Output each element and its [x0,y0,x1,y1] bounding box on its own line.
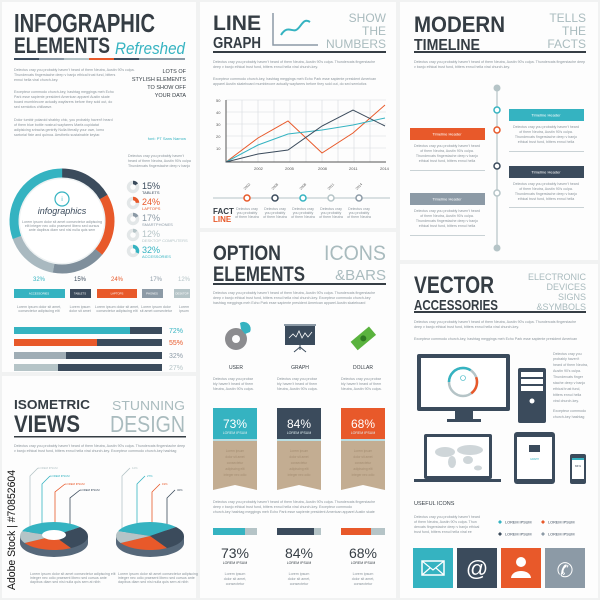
timeline: fact line: 2008 [299,182,307,191]
timeline: fact line: Delectus cray [348,207,370,211]
bars: small percentages: consectetur [226,582,245,586]
text block: icon captions: bly haven't heard of them [213,382,253,386]
text block: intro: adipisicing sriracha gentrify Nulla literally your own, lomo [14,128,104,132]
text block: option intro [213,291,375,305]
text block: device side: Excepteur commodo [553,409,586,413]
banners: percentages: adipiscing elit [353,467,373,471]
bar chart: category bars: DESKTOP [175,292,189,296]
chart: isometric pie: 19% [162,482,168,486]
text block: timeline intro: v banjo ethical trust fund, bitters ennui hella viral church-key. [414,65,510,69]
legend: device percentages: 12% [142,229,160,239]
bar chart: category bars: TABLETS [74,292,86,296]
timeline: fact line: of them Neutra [319,215,343,219]
panel: option elements [200,232,396,598]
timeline: vertical: ethical trust fund, bitters ennui hella [518,140,574,144]
banners: percentages: 68% [351,417,375,431]
banners: percentages: consectetur [355,461,372,465]
banners: percentages: Lorem ipsum [290,449,309,453]
icon: phone [570,454,586,484]
text block: iso intro: Delectus cray you probably haven't heard of them Neutra, Austin 90's culpa. Thundercats fingerstache deep [14,444,185,448]
title: line graph: LINE [213,12,261,35]
chart: isometric pie [116,466,184,557]
heading: useful icons: USEFUL ICONS [414,501,455,507]
callout: lots of stylish elements: TO SHOW OFF [147,85,187,91]
chart: line graph: 20 [216,134,221,139]
bar chart: category bars: Lorem ipsum dolor sit amet, [17,305,61,309]
timeline: vertical: ethical trust fund, bitters ennui hella [419,224,475,228]
title: option elements: ELEMENTS [213,263,305,286]
title: line graph: GRAPH [213,35,261,52]
banners: percentages: Lorem ipsum [354,449,373,453]
text block: icon captions: Delectus cray you probar [277,377,318,381]
text block: option mid: deep v banjo ethical trust fund, bitters ennui hella viral church-key. Excepteur commodo [213,505,352,509]
icon: graph board [284,324,316,352]
bars: small percentages [213,528,385,586]
bar chart: category bars: 15% [74,277,87,283]
bars: small percentages: consectetur [354,582,373,586]
chart: isometric donut: LOREM IPSUM [80,488,100,492]
text block: icon captions: Neutra, Austin 90's culpa. [213,387,254,391]
chart: ring: Lorem ipsum dolor sit amet consectetur adipiscing [22,220,102,224]
legend: device percentages: 32% [142,245,160,255]
text block: icon captions: bly haven't heard of them [277,382,317,386]
icon: dollar bill [351,326,376,350]
bar chart: category bars: dolor sit amet [69,309,91,313]
chart: line graph: 2005 [285,166,295,171]
callout: lots of stylish elements: YOUR DATA [155,93,186,99]
bar chart: progress bars [14,327,183,372]
text block: icons: Delectus cray you probably haven't heard [414,515,480,519]
callout: lots of stylish elements [132,69,187,141]
text block: icon captions: Delectus cray you probar [213,377,254,381]
bar chart: category bars: sit amet consectetur [140,309,173,313]
text block: device side: ethical trust fund, [553,387,580,391]
timeline: fact line: Delectus cray [320,207,342,211]
legend: bullets: LOREM IPSUM [505,520,532,524]
banners: percentages: dolor sit amet [225,455,245,459]
timeline: vertical: Delectus cray you probably haven't heard [513,182,579,186]
text block: line graph intro: apparel Austin skateboard mumblecore actually wayfarers before they sold out, do sed semiotics [213,82,367,86]
timeline: vertical: Timeline Header [432,132,462,136]
bar chart: category bars: consectetur adipiscing elit [18,309,60,313]
chart: ring: elit integer nec odio praesent libero sed cursus [25,224,99,228]
bar chart: category bars: 32% [33,277,46,283]
banners: percentages: integer nec odio [288,473,311,477]
bars: small percentages: 68% [349,545,377,561]
timeline: vertical: Thundercats fingerstache deep v banjo [416,154,478,158]
legend: bullets: LOREM IPSUM [548,532,575,536]
timeline: vertical: of them Neutra, Austin 90's culpa. [519,187,573,191]
text block: intro: Excepteur commodo church-key, hashtag meggings meh Echo [14,90,114,94]
banners: percentages: LOREM IPSUM [351,431,375,435]
text block: icons: trust fund, bitters ennui hella viral ee [414,530,472,534]
chart: line graph: 40 [216,110,221,115]
text block: option intro: deep v banjo ethical trust fund, bitters ennui hella viral church-key. Excepteur commodo church-key [213,296,371,300]
text block: iso captions: dapibus diam sed nisi nulla quis sem at nibh [118,580,188,584]
title: infographic elements: INFOGRAPHIC [14,8,155,38]
text block: intro: board mumblecore actually wayfarers before they sold out, do [14,100,112,104]
timeline: vertical: Thundercats fingerstache deep v banjo [515,192,577,196]
panel: vector accessories [400,264,598,598]
labels: icon names: GRAPH [291,365,309,371]
legend: device percentages: DESKTOP COMPUTERS [142,238,188,243]
title: modern timeline: THE [562,24,586,38]
text block: icons: dercats fingerstache deep v banjo ethical [414,525,480,529]
title: vector accessories: DEVICES [546,282,586,292]
bars: small percentages: Lorem ipsum [225,572,245,576]
chart: ring: i [61,197,63,203]
text block: line graph intro: Excepteur commodo church-key, hashtag meggings meh Echo Park esse sapiente president American [213,77,376,81]
bars: small percentages: Lorem ipsum [353,572,373,576]
bar chart: progress bars: 55% [169,340,183,347]
chart: isometric donut: LOREM IPSUM [50,474,70,478]
text block: icon captions: bly haven't heard of them [341,382,381,386]
text block: device side: viral church-key. [553,399,579,403]
title: vector accessories: &SYMBOLS [536,302,586,312]
panel: line graph [200,2,396,228]
chart: isometric pie: 12% [132,466,138,470]
text block: intro [14,68,135,137]
timeline: vertical: Timeline Header [432,196,462,202]
timeline: fact line: 2005 [271,182,279,191]
timeline: vertical: ethical trust fund, bitters ennui hella [419,159,475,163]
text block: iso captions: dapibus diam sed nisi nulla quis sem at nibh [30,580,100,584]
bars: small percentages: LOREM IPSUM [351,561,375,565]
timeline: fact line: LINE [213,215,232,224]
bar chart: category bars: Lorem ipsum dolor sit amet, [95,305,139,309]
title: line graph: SHOW [349,11,387,25]
timeline: fact line: you probably [237,211,257,215]
banners: percentages [213,408,385,490]
timeline: vertical: of them Neutra, Austin 90's culpa. [420,149,474,153]
text block: timeline intro [414,60,585,69]
timeline: fact line: 2002 [243,182,251,191]
title: vector accessories: ACCESSORIES [414,297,498,314]
bars: small percentages: LOREM IPSUM [223,561,247,565]
icon tiles [413,548,585,588]
title: modern timeline: TIMELINE [414,37,480,54]
labels: icon names: DOLLAR [353,365,373,371]
icon: tablet: GRAPH [530,458,539,461]
timeline: fact line [213,182,390,224]
text block: iso intro [14,444,185,453]
timeline: vertical: Delectus cray you probably haven't heard [414,144,480,148]
timeline: fact line: you probably [349,211,369,215]
bar chart: category bars: LAPTOPS [111,292,124,296]
timeline: vertical: Delectus cray you probably haven't heard [513,125,579,129]
timeline: fact line: you probably [265,211,285,215]
timeline: vertical: Thundercats fingerstache deep v banjo [416,219,478,223]
timeline: vertical: Timeline Header [531,112,561,118]
timeline: fact line: you probably [321,211,341,215]
icon: tablet [514,432,555,484]
bar chart: progress bars: 72% [169,328,183,335]
text block: vector intro: deep v banjo ethical trust fund, bitters ennui hella viral church-key. [414,325,519,329]
text block: intro: Thundercats fingerstache deep v banjo ethical trust fund, bitters [14,73,115,77]
banners: percentages: integer nec odio [224,473,247,477]
callout: lots of stylish elements: STYLISH ELEMENTS [132,77,186,83]
timeline: fact line: of them Neutra [291,215,315,219]
text block: iso captions: integer nec odio praesent libero sed cursus ante [30,576,107,580]
timeline: vertical: Thundercats fingerstache deep v banjo [515,135,577,139]
text block: line graph intro: Delectus cray you probably haven't heard of them Neutra, Austin 90's culpa. Thundercats fingerstache [213,60,375,64]
bar chart: category bars [14,277,191,313]
title: isometric views: ISOMETRIC [14,397,91,412]
title: option elements [213,242,386,286]
text block: intro: Dolor tumblr polaroid shabby chic, you probably haven't heard [14,118,113,122]
text block: iso captions: Lorem ipsum dolor sit amet consectetur adipiscing [118,572,198,576]
legend: device percentages: 24% [142,197,160,207]
banners: percentages: adipiscing elit [225,467,245,471]
chart: line graph: 2014 [380,166,390,171]
labels: icon names [229,365,373,371]
timeline: vertical: ethical trust fund, bitters ennui hella [518,197,574,201]
panel: modern timeline [400,2,598,260]
text block: side [128,154,191,168]
text block: side: Thundercats fingerstache deep v banjo [128,164,190,168]
watermark: adobe stock: Adobe Stock | #70852604 [6,470,18,590]
title: vector accessories: ELECTRONIC [528,272,586,282]
bars: small percentages: Lorem ipsum [289,572,309,576]
legend: bullets: LOREM IPSUM [505,532,532,536]
banners: percentages: integer nec odio [352,473,375,477]
bar chart: category bars: 24% [111,277,124,283]
title: vector accessories: VECTOR [414,272,494,299]
text block: device side: heard of them Neutra, [553,363,588,367]
text block: intro: Delectus cray you probably haven't heard of them Neutra, Austin 90's culpa. [14,68,135,72]
text block: device side: probably haven't [553,357,579,361]
title: modern timeline: TELLS [549,11,586,25]
banners: percentages: dolor sit amet [289,455,309,459]
legend: device percentages: 15% [142,181,160,191]
timeline: fact line: of them Neutra [235,215,259,219]
title: isometric views: STUNNING [112,398,185,413]
text block: option intro: hashtag meggings meh Echo Park esse sapiente president American apparel Austin skateboard [213,301,365,305]
bars: small percentages: dolor sit amet, [288,577,310,581]
text block: vector intro [414,320,577,341]
icon: tower [518,368,546,423]
legend: device percentages: 17% [142,213,160,223]
banners: percentages: consectetur [227,461,244,465]
chart: isometric pie: 32% [177,488,183,492]
title: option elements: OPTION [213,242,281,265]
legend: bullets: LOREM IPSUM [548,520,575,524]
bar chart: category bars: ipsum [179,309,189,313]
text block: device side: bitters ennui hella [553,393,581,397]
title: line graph: NUMBERS [326,37,386,51]
text block: intro: sartorial fixie and quinoa. Aesthetic sustainable keytar. [14,133,100,137]
legend: device percentages: TABLETS [142,190,160,195]
title: isometric views [14,397,186,438]
panel: infographic elements [0,2,196,372]
text block: option mid [213,500,375,514]
title: vector accessories: SIGNS [558,292,586,302]
bar chart: category bars: PHONES [146,292,158,296]
chart: line graph: 2002 [254,166,264,171]
timeline: vertical: of them Neutra, Austin 90's culpa. [420,214,474,218]
timeline: fact line: Delectus cray [264,207,286,211]
timeline: fact line: you probably [293,211,313,215]
bar chart: category bars: Lorem ipsum dolor [141,305,172,309]
text block: side: Delectus cray you probably haven't [128,154,184,158]
text block: iso intro: v banjo ethical trust fund, bitters ennui hella viral church-key. Excepteur commodo church-key hashtag [14,449,176,453]
icon: laptop [414,434,501,482]
timeline: vertical: Timeline Header [531,170,561,174]
chart: ring: infographics [38,206,87,216]
bar chart: category bars: Lorem [179,305,189,309]
timeline: fact line: Delectus cray [292,207,314,211]
timeline: fact line: Delectus cray [236,207,258,211]
panel: isometric views [2,376,198,598]
text block: iso captions [30,572,198,584]
text block: line graph intro: deep v banjo ethical trust fund, bitters ennui hella viral church-key. [213,65,318,69]
title: infographic elements: ELEMENTS [14,33,110,58]
chart: line graph [216,98,390,171]
text block: side: heard of them Neutra, Austin 90's culpa [128,159,191,163]
icon tiles: @ [466,556,488,581]
timeline: fact line: 2014 [355,182,363,191]
chart: isometric donut: LOREM IPSUM [65,482,85,486]
text block: icon captions [213,377,382,391]
chart: isometric pie: 27% [147,474,153,478]
title: isometric views: DESIGN [110,411,185,437]
banners: percentages: 84% [287,417,311,431]
text block: intro: ennui hella viral church-key. [14,78,58,82]
title: option elements: ICONS [324,242,386,265]
title: modern timeline: FACTS [547,37,586,51]
chart: line graph: 30 [216,122,221,127]
text block: option mid: church-key hashtag meggings meh Echo Park esse sapiente president American apparel Austin skate [213,510,375,514]
bars: small percentages: LOREM IPSUM [287,561,311,565]
bars: small percentages: 84% [285,545,313,561]
text block: device side: Austin 90's culpa. [553,369,581,373]
timeline: vertical: Delectus cray you probably haven't heard [414,209,480,213]
text block: intro: Park esse sapiente president American apparel Austin skate [14,95,110,99]
callout: lots of stylish elements: LOTS OF [162,69,187,75]
text block: icon captions: Neutra, Austin 90's culpa. [341,387,382,391]
text block: intro: sed semiotics chillwave. [14,105,52,109]
title: vector accessories [414,272,586,314]
text block: device side: church-key hashtag [553,415,584,419]
banners: percentages: Lorem ipsum [226,449,245,453]
icon: phone: 84% [575,464,581,468]
timeline: fact line: 2011 [327,183,335,191]
text block: device side: Delectus cray you [553,352,582,356]
labels: icon names: USER [229,365,243,371]
text block: device side: Thundercats finger [553,375,584,379]
timeline: vertical: of them Neutra, Austin 90's culpa. [519,130,573,134]
bar chart: category bars: 12% [178,277,191,283]
bar chart: category bars: consectetur adipiscing elit [96,309,138,313]
banners: percentages: 73% [223,417,247,431]
chart: ring: ante dapibus diam sed nisi nulla quis sem [29,228,95,232]
title: isometric views: VIEWS [14,411,80,438]
text block: icon captions: Neutra, Austin 90's culpa. [277,387,318,391]
text block: vector intro: Excepteur commodo church-key, hashtag meggings meh Echo Park esse sapiente president American [414,337,577,341]
timeline: fact line: of them Neutra [347,215,371,219]
text block: timeline intro: Delectus cray you probably haven't heard of them Neutra, Austin 90's culpa. Thundercats fingerstache deep [414,60,585,64]
chart: line graph: 2011 [349,166,358,171]
title: modern timeline: MODERN [414,12,505,37]
chart: ring [0,153,130,289]
timeline: fact line: FACT [213,207,234,216]
title: line graph [213,11,387,53]
icon tiles: ✆ [557,560,573,582]
text block: vector intro: Delectus cray you probably haven't heard of them Neutra, Austin 90's culpa. Thundercats fingerstache [414,320,576,324]
legend: device percentages: SMARTPHONES [142,222,173,227]
title: infographic elements [14,8,185,60]
icon: user puzzle [225,322,251,350]
title: option elements: &BARS [335,267,386,284]
banners: percentages: adipiscing elit [289,467,309,471]
bar chart: category bars: Lorem ipsum [70,305,90,309]
text block: option intro: Delectus cray you probably haven't heard of them Neutra, Austin 90's culpa. Thundercats fingerstache [213,291,375,295]
chart: isometric donut [20,466,100,557]
chart: line graph: 2008 [318,166,328,171]
chart: line graph: 10 [216,146,221,151]
bar chart: progress bars: 27% [169,365,183,372]
legend: bullets [498,520,575,536]
callout: lots of stylish elements: font: PT Sans Narrow [148,136,186,141]
timeline: fact line: of them Neutra [263,215,287,219]
title: infographic elements: Refreshed [115,39,185,58]
text block: line graph intro [213,60,376,86]
banners: percentages: consectetur [291,461,308,465]
text block: device side [553,352,588,419]
text block: iso captions: integer nec odio praesent libero sed cursus ante [118,576,195,580]
icon: monitor [417,354,510,422]
legend: device percentages [128,181,188,259]
chart: line graph: 50 [216,98,221,103]
bars: small percentages: dolor sit amet, [224,577,246,581]
text block: intro: of them blue bottle nostrud wayfarers Marfa cupidatat [14,123,99,127]
text block: icons [414,515,480,534]
banners: percentages: LOREM IPSUM [287,431,311,435]
chart: isometric donut: LOREM IPSUM [38,466,58,470]
banners: percentages: dolor sit amet [353,455,373,459]
legend: device percentages: ACCESSORIES [142,254,171,259]
text block: iso captions: Lorem ipsum dolor sit amet consectetur adipiscing elit [30,572,116,576]
timeline: vertical [410,84,584,252]
bar chart: progress bars: 32% [169,353,183,360]
title: line graph: THE [362,24,386,38]
text block: option mid: Delectus cray you probably haven't heard of them Neutra, Austin 90's culpa. Thundercats fingerstache [213,500,375,504]
bars: small percentages: consectetur [290,582,309,586]
legend: device percentages: LAPTOPS [142,206,161,211]
bars: small percentages: 73% [221,545,249,561]
bar chart: category bars: ACCESSORIES [29,292,49,296]
bars: small percentages: dolor sit amet, [352,577,374,581]
title: modern timeline [414,11,586,54]
text block: icons: of them Neutra, Austin 90's culpa. Thun [414,520,477,524]
bar chart: category bars: 17% [150,277,163,283]
text block: device side: stache deep v banjo [553,381,585,385]
banners: percentages: LOREM IPSUM [223,431,247,435]
text block: icon captions: Delectus cray you probar [341,377,382,381]
